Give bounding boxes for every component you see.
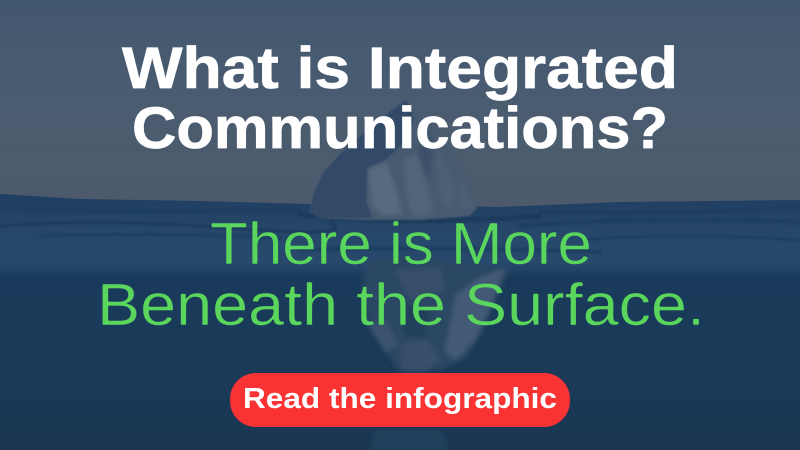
subtitle bbox=[97, 211, 705, 338]
title: What is Integrated bbox=[122, 36, 678, 101]
background: sky bbox=[0, 0, 800, 210]
background: sea bbox=[0, 194, 800, 450]
iceberg below water bbox=[362, 258, 510, 450]
subtitle: Beneath the Surface. bbox=[97, 272, 705, 338]
button: read the infographic bbox=[230, 373, 570, 427]
title: Communications? bbox=[132, 96, 668, 161]
subtitle: There is More bbox=[210, 211, 592, 277]
sea ripples bbox=[0, 207, 800, 252]
button: read the infographic: Read the infographic bbox=[243, 383, 557, 415]
title bbox=[122, 36, 678, 161]
iceberg above water bbox=[310, 100, 478, 220]
